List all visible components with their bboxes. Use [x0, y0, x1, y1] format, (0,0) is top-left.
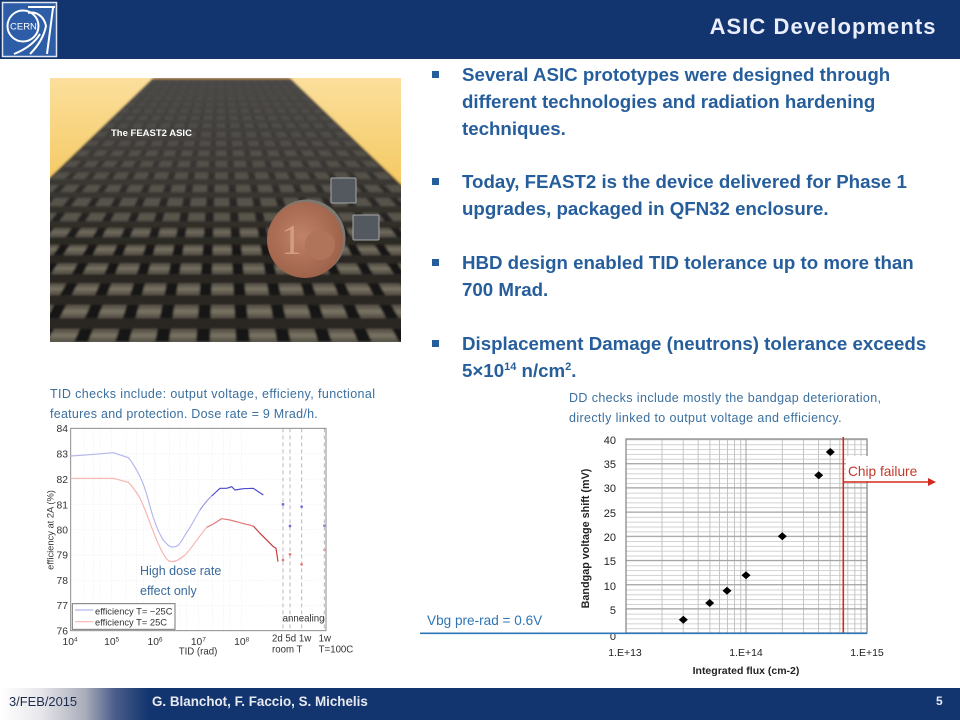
chart: bandgap voltage shift: [420, 435, 936, 677]
axis title y: efficiency at 2A (%): [46, 490, 56, 570]
x axis labels: [608, 647, 884, 659]
y axis ticks: 84: [56, 424, 68, 435]
x axis labels: 1.E+13: [608, 647, 642, 659]
axis title x: TID (rad): [179, 646, 217, 657]
bullet 2: Today, FEAST2 is the device delivered for Phase 1: [462, 171, 907, 192]
x axis ticks: 10: [147, 637, 159, 648]
x axis ticks: [62, 636, 250, 648]
x axis ticks: 4: [74, 636, 78, 643]
DD caption: [569, 391, 881, 425]
chip failure label: Chip failure: [848, 464, 917, 479]
icon: loose chip: [331, 178, 356, 203]
TID caption: TID checks include: output voltage, efficieny, functional: [50, 387, 375, 401]
annealing labels: annealing: [283, 613, 325, 624]
x axis ticks: 10: [234, 637, 246, 648]
footer authors: G. Blanchot, F. Faccio, S. Michelis: [152, 694, 368, 709]
icon: one cent coin: [267, 200, 346, 278]
y axis ticks: 76: [56, 626, 68, 637]
baseline: [420, 632, 867, 634]
y axis labels: 30: [604, 483, 616, 495]
x axis ticks: 8: [246, 636, 250, 643]
DD caption: directly linked to output voltage and efficiency.: [569, 411, 842, 425]
y axis labels: [604, 435, 616, 643]
y axis labels: 40: [604, 435, 616, 447]
data points: [679, 448, 835, 624]
x axis ticks: 10: [62, 637, 74, 648]
y axis labels: 10: [604, 581, 616, 593]
axis title y: Bandgap voltage shift (mV): [580, 468, 592, 608]
page number: 5: [936, 694, 943, 708]
icon: second loose chip: [353, 215, 379, 240]
annealing points: [282, 503, 326, 566]
y axis ticks: 79: [56, 551, 68, 562]
annealing labels: 1w: [319, 634, 331, 645]
y axis ticks: 78: [56, 576, 68, 587]
annealing labels: 2d 5d 1w: [272, 634, 311, 645]
y axis ticks: 81: [56, 500, 68, 511]
annealing labels: [272, 613, 353, 656]
x axis ticks: 7: [202, 636, 206, 643]
chart annotation: High dose rate: [140, 564, 221, 578]
x axis ticks: 6: [159, 636, 163, 643]
header bar: [0, 0, 960, 59]
chart annotation: effect only: [140, 584, 197, 598]
y axis ticks: 77: [56, 601, 68, 612]
TID caption: features and protection. Dose rate = 9 Mrad/h.: [50, 407, 318, 421]
callout mask: [846, 456, 868, 481]
bullet 2: [432, 171, 907, 219]
x axis ticks: 10: [191, 637, 202, 648]
annealing labels: T=100C: [319, 645, 353, 656]
bullet 3: [432, 252, 914, 300]
chart annotation: [140, 564, 221, 598]
bullet 1: [432, 64, 890, 139]
y axis labels: 15: [604, 556, 616, 568]
chip failure line: [842, 437, 844, 633]
photo label: The FEAST2 ASIC: [111, 128, 192, 139]
footer date: 3/FEB/2015: [9, 694, 77, 709]
bullet 4: 5×1014 n/cm2.: [462, 360, 576, 381]
y axis ticks: 82: [56, 475, 68, 486]
baseline label: Vbg pre-rad = 0.6V: [427, 613, 542, 628]
annealing labels: room T: [272, 645, 303, 656]
x axis labels: 1.E+14: [729, 647, 763, 659]
x axis ticks: 10: [104, 637, 116, 648]
title: ASIC Developments: [710, 14, 936, 39]
icon: one cent coin: 1: [281, 218, 302, 264]
DD caption: DD checks include mostly the bandgap deterioration,: [569, 391, 881, 405]
TID caption: [50, 387, 375, 421]
x axis labels: 1.E+15: [850, 647, 884, 659]
x axis ticks: 5: [116, 636, 120, 643]
chart: efficiency vs TID: [46, 424, 353, 657]
legend: efficiency T= 25C: [95, 618, 167, 628]
footer bar: [0, 688, 960, 720]
y axis labels: 25: [604, 508, 616, 520]
y axis ticks: [56, 424, 68, 637]
bullet 2: upgrades, packaged in QFN32 enclosure.: [462, 198, 829, 219]
red curve: [71, 478, 278, 562]
chip failure arrow: [843, 478, 936, 486]
bullet 1: different technologies and radiation hardening: [462, 91, 875, 112]
y axis labels: 35: [604, 459, 616, 471]
icon: CERN logo: CERN: [10, 22, 37, 32]
bullet 4: Displacement Damage (neutrons) tolerance exceeds: [462, 333, 926, 354]
y axis labels: 20: [604, 532, 616, 544]
bullet 1: techniques.: [462, 118, 566, 139]
bullet 1: Several ASIC prototypes were designed through: [462, 64, 890, 85]
blue curve: [71, 453, 263, 547]
icon: CERN logo: [2, 2, 58, 58]
y axis ticks: 80: [56, 525, 68, 536]
y axis labels: 0: [610, 631, 616, 643]
legend: efficiency T= −25C: [95, 607, 173, 617]
axis title x: Integrated flux (cm-2): [693, 665, 799, 677]
bullet 4: [432, 333, 926, 381]
bullet 3: HBD design enabled TID tolerance up to more than: [462, 252, 914, 273]
bullet 3: 700 Mrad.: [462, 279, 548, 300]
photo: FEAST2 ASIC: [50, 78, 401, 342]
y axis labels: 5: [610, 605, 616, 617]
legend: [72, 604, 175, 629]
y axis ticks: 83: [56, 450, 68, 461]
